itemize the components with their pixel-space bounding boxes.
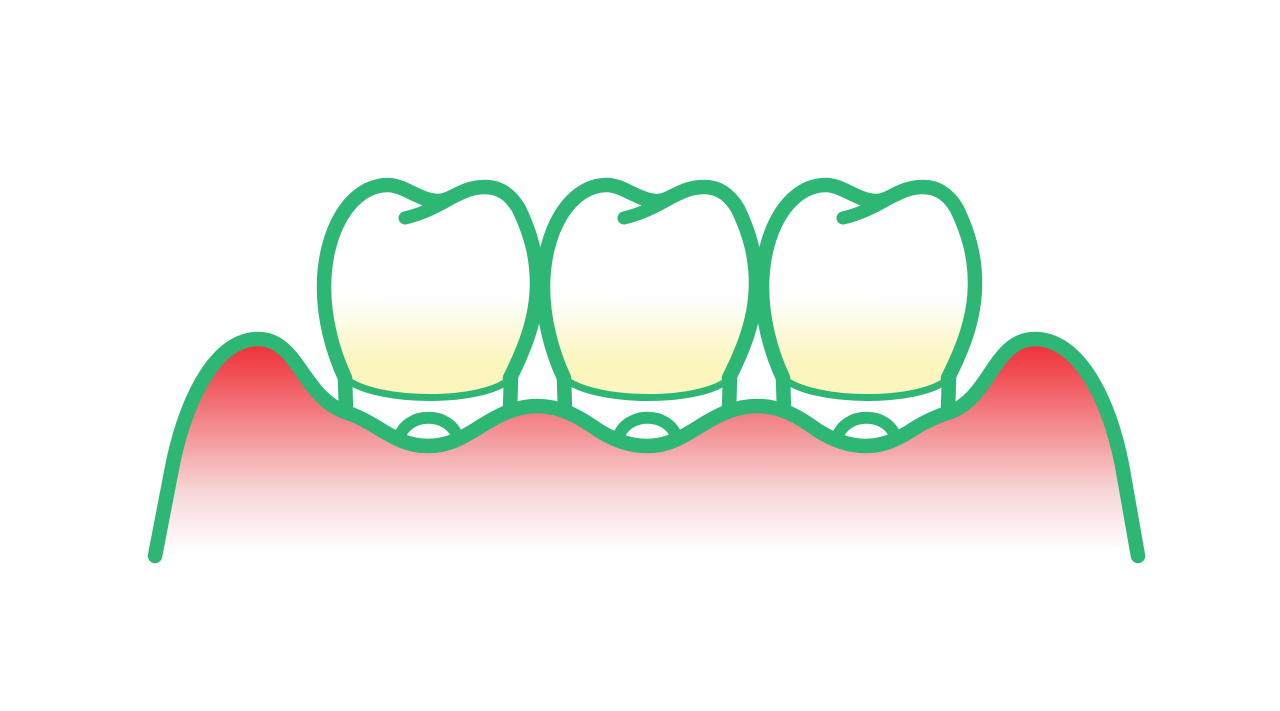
tooth 3 papilla arc bbox=[837, 418, 896, 438]
tooth 2 crown outline bbox=[543, 185, 756, 378]
tooth 2 cervical arc bbox=[564, 378, 730, 398]
tooth 2 papilla arc bbox=[618, 418, 677, 438]
tooth 1 root bbox=[345, 378, 511, 410]
tooth 1 bbox=[324, 185, 537, 438]
tooth 2 bbox=[543, 185, 756, 438]
tooth 3 crown outline bbox=[762, 185, 975, 378]
tooth 2 root bbox=[564, 378, 730, 410]
tooth 3 fissure bbox=[843, 199, 888, 218]
tooth 3 cervical arc bbox=[783, 378, 949, 398]
tooth 1 crown outline bbox=[324, 185, 537, 378]
tooth 3 bbox=[762, 185, 975, 438]
gum outline bbox=[155, 339, 1138, 556]
gum fill bbox=[155, 339, 1138, 556]
tooth 2 enamel fill bbox=[543, 185, 756, 398]
tooth 1 cervical arc bbox=[345, 378, 511, 398]
tooth 3 root bbox=[783, 378, 949, 410]
tooth 1 fissure bbox=[405, 199, 450, 218]
tooth 1 papilla arc bbox=[399, 418, 458, 438]
tooth 1 enamel fill bbox=[324, 185, 537, 398]
tooth 3 enamel fill bbox=[762, 185, 975, 398]
tooth 2 fissure bbox=[624, 199, 669, 218]
